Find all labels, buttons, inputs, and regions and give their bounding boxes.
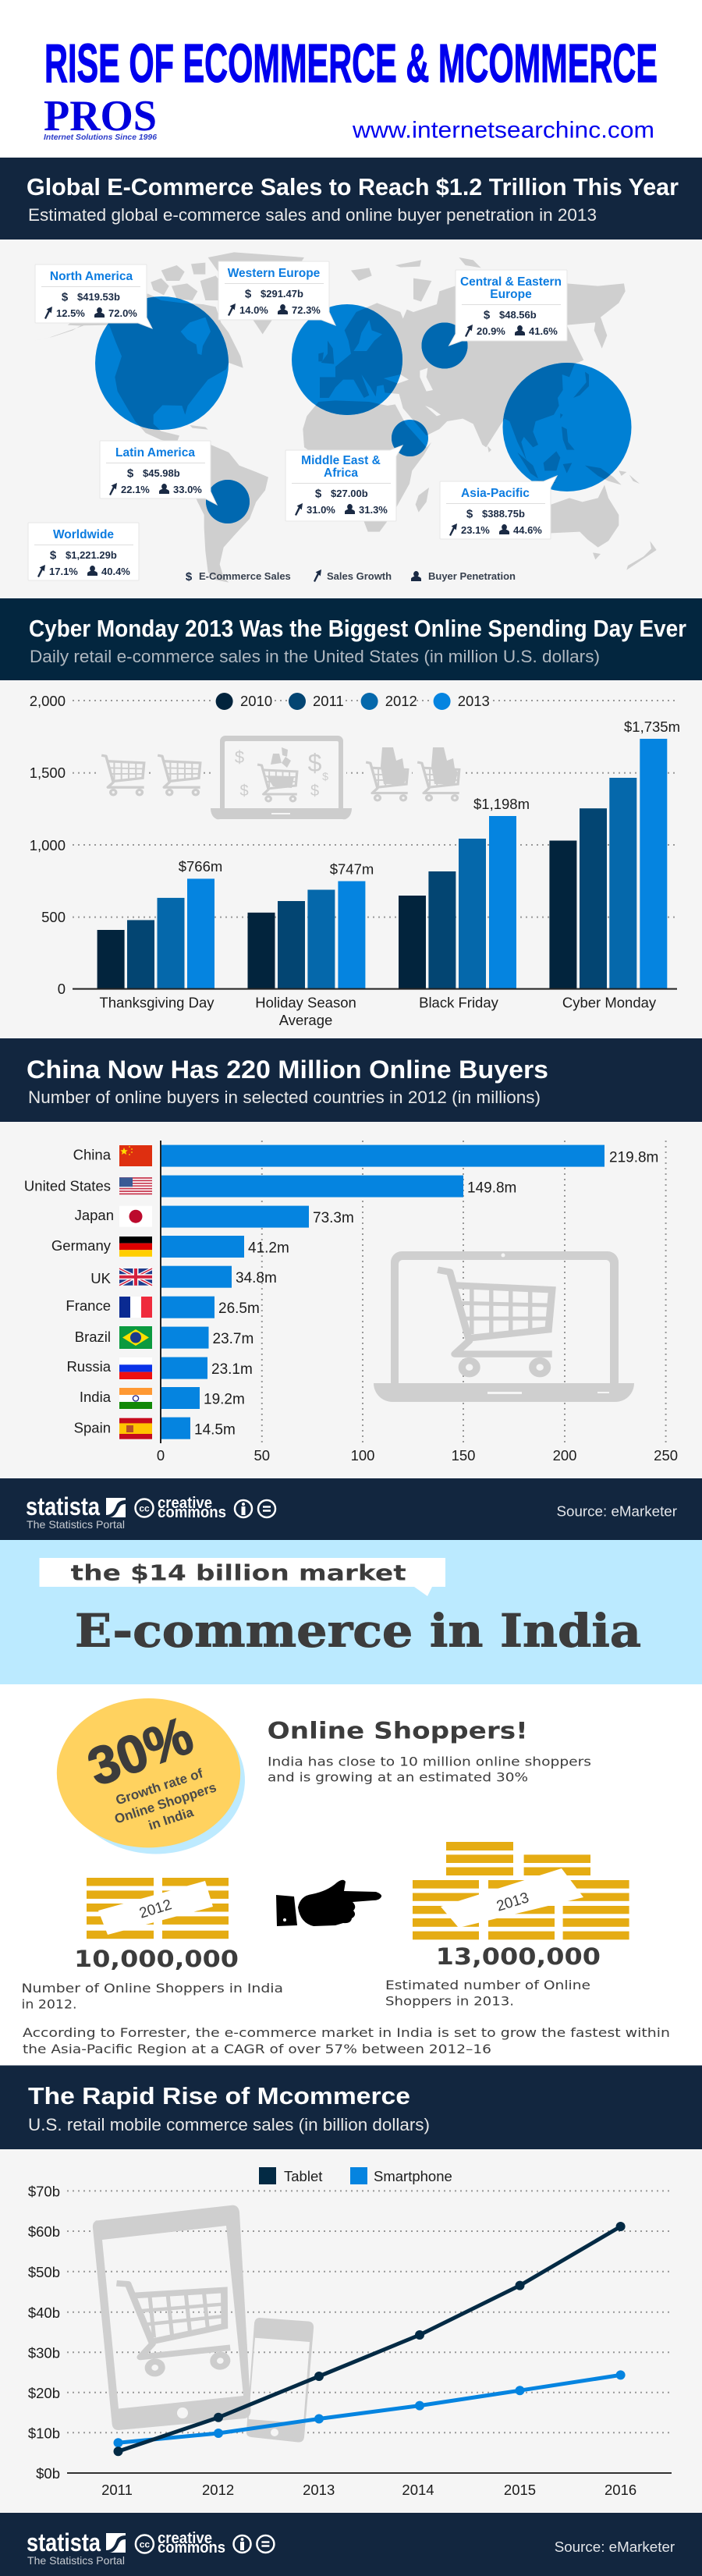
card: North America: $: [62, 290, 69, 304]
icon: 2012 coin stacks: [87, 1878, 229, 1939]
bar value labels: 73.3m: [313, 1210, 354, 1226]
card: Central & Eastern Europe: $48.56b: [499, 309, 537, 321]
logo: PROS: Internet Solutions Since 1996: [44, 133, 157, 142]
footer: statista and source: cc: [140, 2539, 150, 2549]
logo: PROS: PROS: [44, 92, 157, 140]
icon: 2012 coin stacks: 2012: [137, 1897, 174, 1922]
country labels: Spain: [74, 1420, 111, 1435]
chart legend: 2012: [385, 693, 417, 709]
callout: 30 percent growth badge: [57, 1698, 245, 1854]
gridlines and y axis labels: $60b: [28, 2223, 60, 2240]
bar value labels: [194, 1150, 658, 1439]
card: Worldwide: Worldwide: [53, 528, 114, 541]
card: Worldwide: [28, 523, 139, 580]
card: Latin America: 33.0%: [173, 484, 202, 495]
chart legend: [259, 2167, 452, 2184]
flag: Japan: [119, 1206, 152, 1227]
callout: 30 percent growth badge: in India: [147, 1804, 196, 1833]
line series: smartphone: [114, 2370, 626, 2447]
bar group: Black Friday: $1,198m: [473, 796, 530, 812]
y axis gridlines and labels: 500: [41, 909, 66, 925]
vertical gridlines and axis labels: 50: [254, 1447, 270, 1464]
card: Latin America: Latin America: [115, 446, 195, 459]
country labels: Germany: [51, 1237, 112, 1254]
gridlines and y axis labels: $70b: [28, 2183, 60, 2200]
card: Middle East & Africa: 31.0%: [307, 504, 335, 516]
flag: Germany: [119, 1237, 152, 1257]
card: Central & Eastern Europe: 41.6%: [529, 325, 558, 337]
vertical gridlines and axis labels: 100: [351, 1447, 374, 1464]
card: Asia-Pacific: 44.6%: [513, 524, 542, 536]
line series: tablet: [114, 2222, 626, 2456]
icon: 2013 coin stacks: [413, 1842, 629, 1939]
bar value labels: 149.8m: [467, 1180, 516, 1197]
panel: global e-commerce map: [0, 158, 702, 599]
footer: statista and source: The Statistics Portal: [27, 1518, 125, 1531]
y axis gridlines and labels: 1,500: [30, 765, 66, 781]
x axis: Average: [279, 1012, 332, 1028]
flag: Russia: [119, 1357, 152, 1379]
card: Asia-Pacific: Asia-Pacific: [461, 487, 530, 500]
x axis: 2011: [101, 2482, 133, 2498]
card: Asia-Pacific: 23.1%: [461, 524, 490, 536]
speech bubble heading: the $14 billion market: [71, 1560, 406, 1585]
gridlines and y axis labels: $50b: [28, 2264, 60, 2280]
map legend: Buyer Penetration: [428, 570, 516, 582]
footer: statista and source: statista: [27, 2528, 101, 2556]
x axis: [67, 2472, 672, 2498]
vertical gridlines and axis labels: 250: [654, 1447, 678, 1464]
card: Asia-Pacific: $: [466, 507, 473, 521]
card: Central & Eastern Europe: [449, 270, 567, 346]
flag: India: [119, 1388, 152, 1409]
bar group: Cyber Monday: [549, 719, 680, 989]
flag: Spain: [119, 1418, 152, 1439]
card: Worldwide: 40.4%: [101, 566, 130, 577]
footer: statista and source: [0, 2513, 702, 2576]
card: Central & Eastern Europe: Europe: [490, 288, 532, 301]
section heading: mcommerce: U.S. retail mobile commerce sales (in billion dollars): [28, 2115, 430, 2134]
callout: 30 percent growth badge: Growth rate of: [114, 1765, 205, 1808]
bar value labels: 23.7m: [212, 1331, 254, 1347]
card: North America: $419.53b: [77, 291, 120, 303]
stat: 10,000,000: 10,000,000: [74, 1946, 239, 1972]
panel: E-commerce in India: [0, 1540, 702, 2056]
text block: shoppers in 2012: Number of Online Shoppers in India: [22, 1981, 283, 1996]
text block: shoppers in 2013: [385, 1978, 590, 2008]
card: Worldwide: 17.1%: [49, 566, 78, 577]
stat: 13,000,000: 13,000,000: [436, 1943, 601, 1970]
speech bubble heading: [39, 1558, 445, 1596]
website url: www.internetsearchinc.com: [352, 117, 654, 144]
bar value labels: 26.5m: [218, 1300, 260, 1317]
flag: United States: [119, 1177, 152, 1194]
map legend: [186, 569, 516, 584]
banner background: [0, 1540, 702, 1684]
card: North America: 72.0%: [108, 307, 137, 319]
icon: pointing hand: [276, 1880, 381, 1926]
bar value labels: 219.8m: [609, 1150, 658, 1166]
x axis: 2016: [604, 2482, 636, 2498]
chart background: [0, 1122, 702, 1478]
card: North America: 12.5%: [56, 307, 85, 319]
text block: Forrester forecast: According to Forrester, the e-commerce market in India is set to grow the fastest within: [23, 2025, 670, 2040]
section background: map: [0, 240, 702, 599]
card: Worldwide: $1,221.29b: [66, 549, 117, 561]
icon: 2013 coin stacks: 2013: [495, 1889, 531, 1915]
section heading: China: Number of online buyers in selected countries in 2012 (in millions): [28, 1088, 541, 1107]
bar group: Holiday Season Average: [248, 861, 374, 989]
bar group: Black Friday: [399, 796, 530, 989]
chart legend: Tablet: [284, 2168, 322, 2184]
heading: Online Shoppers: Online Shoppers!: [268, 1718, 528, 1744]
text block: online shoppers intro: and is growing at an estimated 30%: [268, 1769, 528, 1785]
map legend: $: [186, 570, 193, 584]
chart legend: 2010: [240, 693, 272, 709]
map land inside bubbles: [107, 296, 610, 523]
card: Western Europe: 72.3%: [292, 304, 321, 316]
icon: laptop with cart and dollar signs: $: [235, 747, 244, 767]
flag: China: [119, 1145, 152, 1166]
y axis gridlines and labels: 0: [58, 981, 66, 997]
card: Middle East & Africa: [285, 445, 402, 521]
card: Western Europe: Western Europe: [228, 267, 321, 280]
x axis: 2012: [202, 2482, 234, 2498]
gridlines and y axis labels: $40b: [28, 2305, 60, 2321]
footer: statista and source: cc: [139, 1503, 150, 1513]
region bubbles: [95, 296, 632, 523]
icon: laptop with cart and dollar signs: $: [308, 749, 322, 777]
callout: 30 percent growth badge: Online Shoppers: [113, 1779, 218, 1827]
gridlines and y axis labels: $20b: [28, 2385, 60, 2401]
text block: online shoppers intro: [268, 1754, 591, 1785]
card: Middle East & Africa: Middle East &: [301, 454, 381, 467]
footer: statista and source: Source: eMarketer: [555, 2539, 675, 2555]
bar group: Holiday Season Average: $747m: [330, 861, 374, 877]
footer: statista and source: commons: [158, 1504, 226, 1521]
card: Worldwide: $: [50, 549, 57, 562]
icon: carts full of bags: [366, 747, 459, 800]
panel: Cyber Monday bar chart: [0, 598, 702, 1038]
chart legend: 2011: [313, 693, 344, 709]
icon: tablet with cart: [93, 2205, 251, 2430]
text block: shoppers in 2012: [22, 1981, 283, 2011]
country labels: Russia: [66, 1358, 112, 1375]
card: Western Europe: $291.47b: [261, 288, 303, 300]
card: Central & Eastern Europe: 20.9%: [477, 325, 505, 337]
gridlines and y axis labels: $0b: [36, 2465, 60, 2482]
map legend: Sales Growth: [327, 570, 392, 582]
gridlines and y axis labels: $10b: [28, 2425, 60, 2442]
country labels: India: [80, 1389, 112, 1405]
flag: Brazil: [119, 1326, 152, 1349]
x axis: [73, 988, 677, 1028]
bar value labels: 19.2m: [204, 1392, 245, 1407]
gridlines and y axis labels: $30b: [28, 2345, 60, 2361]
country labels: Japan: [75, 1207, 114, 1223]
flag: France: [119, 1297, 152, 1318]
text block: Forrester forecast: [23, 2025, 670, 2056]
icon: laptop with cart and dollar signs: $: [310, 782, 319, 800]
country labels: Brazil: [75, 1329, 111, 1345]
card: Middle East & Africa: $: [315, 487, 322, 501]
footer: statista and source: creative: [158, 1495, 212, 1512]
footer: statista and source: commons: [158, 2539, 225, 2556]
icon: laptop with cart: [374, 1251, 634, 1402]
bar group: Cyber Monday: $1,735m: [624, 719, 680, 735]
bar value labels: 41.2m: [248, 1240, 289, 1256]
vertical gridlines and axis labels: 150: [452, 1447, 475, 1464]
card: Western Europe: $: [245, 287, 252, 301]
callout: 30 percent growth badge: 30%: [80, 1705, 200, 1797]
card: Middle East & Africa: Africa: [324, 467, 358, 480]
bar value labels: 23.1m: [211, 1361, 253, 1378]
card: Asia-Pacific: $388.75b: [482, 508, 525, 520]
flag: United Kingdom: [119, 1268, 152, 1286]
card: Middle East & Africa: $27.00b: [331, 488, 368, 499]
panel: mcommerce line chart: [0, 2066, 702, 2576]
section heading: China: China Now Has 220 Million Online Buyers: [27, 1056, 548, 1084]
country labels: United States: [24, 1178, 111, 1194]
map legend: E-Commerce Sales: [199, 570, 291, 582]
country labels: China: [73, 1147, 112, 1162]
footer: statista and source: creative: [158, 2530, 212, 2547]
world map: [31, 252, 657, 583]
bar group: Thanksgiving Day: [98, 858, 222, 989]
text block: shoppers in 2013: Estimated number of Online: [385, 1978, 590, 1992]
country labels: France: [66, 1297, 111, 1314]
vertical gridlines and axis labels: 200: [553, 1447, 576, 1464]
card: North America: [35, 264, 152, 328]
chart background: [0, 680, 702, 1038]
card: Latin America: $: [127, 467, 134, 481]
card: Latin America: $45.98b: [143, 467, 180, 479]
country labels: [24, 1147, 114, 1435]
bar value labels: 34.8m: [236, 1270, 277, 1286]
icon: laptop with cart and dollar signs: [211, 736, 352, 819]
section heading: mcommerce: [0, 2066, 702, 2149]
card: Latin America: [100, 441, 217, 505]
x axis: Black Friday: [419, 994, 499, 1011]
chart legend: [216, 693, 490, 710]
card: Western Europe: [218, 261, 335, 325]
panel: China online buyers bar chart: [0, 1038, 702, 1540]
country labels: UK: [90, 1270, 112, 1286]
section heading: global e-commerce: Estimated global e-commerce sales and online buyer penetration in 2013: [28, 205, 597, 225]
card: Western Europe: 14.0%: [239, 304, 268, 316]
card: Latin America: 22.1%: [121, 484, 150, 495]
card: Central & Eastern Europe: Central & Eastern: [460, 275, 562, 289]
icon: laptop with cart and dollar signs: $: [239, 782, 249, 800]
section heading: mcommerce: The Rapid Rise of Mcommerce: [28, 2082, 410, 2109]
x axis: 2015: [504, 2482, 536, 2498]
banner title: E-commerce in India: [75, 1604, 641, 1657]
y axis gridlines and labels: 2,000: [30, 693, 66, 709]
x axis: 2014: [402, 2482, 434, 2498]
text block: shoppers in 2012: in 2012.: [22, 1997, 76, 2011]
section heading: China: [0, 1038, 702, 1122]
vertical gridlines and axis labels: 0: [157, 1447, 165, 1464]
y axis gridlines and labels: [30, 693, 675, 997]
section heading: global e-commerce: Global E-Commerce Sales to Reach $1.2 Trillion This Year: [27, 173, 679, 200]
icon: shopping carts: [101, 755, 200, 795]
vertical gridlines and axis labels: [157, 1141, 678, 1464]
card: Middle East & Africa: 31.3%: [359, 504, 388, 516]
chart legend: Smartphone: [374, 2168, 452, 2184]
section heading: Cyber Monday: Daily retail e-commerce sales in the United States (in million U.S. dollars): [30, 647, 600, 666]
text block: online shoppers intro: India has close to 10 million online shoppers: [268, 1754, 591, 1769]
chart background: [0, 2149, 702, 2513]
y axis gridlines and labels: 1,000: [30, 837, 66, 853]
footer: statista and source: statista: [26, 1492, 100, 1520]
icon: smartphone: [246, 2318, 314, 2443]
text block: Forrester forecast: the Asia-Pacific Region at a CAGR of over 57% between 2012–16: [23, 2042, 491, 2056]
bar value labels: 14.5m: [194, 1421, 236, 1439]
card: Central & Eastern Europe: $: [484, 309, 491, 321]
chart legend: 2013: [458, 693, 490, 709]
x axis: Cyber Monday: [562, 994, 657, 1011]
x axis: Holiday Season: [255, 994, 356, 1011]
bar group: Thanksgiving Day: $766m: [179, 858, 222, 875]
bars: online buyers per country: [161, 1145, 604, 1439]
x axis: 2013: [303, 2482, 335, 2498]
footer: statista and source: Source: eMarketer: [557, 1503, 677, 1520]
gridlines and y axis labels: [28, 2183, 672, 2482]
card: North America: North America: [50, 270, 133, 283]
section heading: global e-commerce: [0, 158, 702, 240]
text block: shoppers in 2013: Shoppers in 2013.: [385, 1994, 514, 2008]
x axis: Thanksgiving Day: [99, 994, 214, 1011]
card: Asia-Pacific: [440, 476, 557, 539]
icon: laptop with cart and dollar signs: $: [322, 770, 328, 782]
section heading: Cyber Monday: [0, 598, 702, 680]
footer: statista and source: [0, 1478, 702, 1540]
footer: statista and source: The Statistics Portal: [27, 2554, 125, 2567]
